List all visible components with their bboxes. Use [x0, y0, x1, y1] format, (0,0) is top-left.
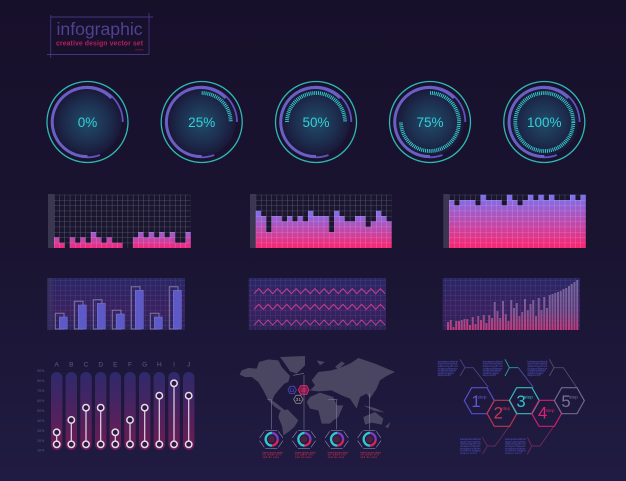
marker captions: sed do eius: [295, 456, 312, 459]
percent axis: 50%: [37, 409, 45, 413]
step captions: adipiscing elit sed: [527, 364, 548, 368]
column letters: H: [157, 362, 162, 368]
gauge 25%: [161, 82, 242, 162]
column letters: G: [142, 362, 147, 368]
marker captions: sed do eius: [262, 456, 280, 459]
step 2 hex: step: [501, 406, 511, 411]
step captions: do eiusmod tempor: [460, 444, 482, 448]
location marker 4: [358, 430, 381, 448]
step 2 hex: 2: [494, 403, 503, 422]
marker captions: sed do eius: [328, 456, 345, 459]
step captions: incididunt ut labore: [460, 446, 481, 450]
step captions: lorem ipsum dolor sit: [527, 359, 547, 363]
gauge 0%: 0%: [78, 115, 97, 130]
marker captions: lorem ipsum dolor: [328, 451, 348, 454]
step captions: adipiscing elit sed: [460, 442, 481, 446]
connector: step 4: [527, 426, 554, 454]
step 2 hex: [487, 400, 517, 426]
marker captions: sed do eius: [360, 456, 378, 459]
slider chart: [37, 362, 194, 452]
marker captions: lorem ipsum dolor: [360, 451, 381, 454]
marker captions: lorem ipsum dolor: [295, 451, 316, 454]
gauge 75%: [390, 82, 470, 162]
step captions: do eiusmod tempor: [527, 366, 548, 370]
column letters: I: [173, 362, 175, 368]
column letters: F: [128, 362, 132, 368]
connector: step 3: [505, 359, 533, 387]
column letters: B: [69, 362, 73, 368]
block chart: medium values: [250, 194, 392, 248]
percent axis: 60%: [37, 399, 45, 403]
gauge 100%: 100%: [527, 115, 562, 130]
percent axis: 10%: [37, 448, 45, 452]
step captions: do eiusmod tempor: [438, 366, 459, 370]
block chart: high values: [443, 194, 586, 248]
gauge 0%: [47, 82, 128, 162]
step 5 hex: step: [569, 395, 578, 400]
step captions: do eiusmod tempor: [483, 366, 504, 370]
step 5 hex: 5: [561, 392, 571, 411]
step 3 hex: 3: [516, 392, 526, 411]
percent axis: 20%: [37, 439, 45, 443]
percent axis: 30%: [37, 429, 45, 433]
title block: infographic: [56, 19, 143, 39]
slider knobs: [54, 380, 192, 447]
step 3 hex: [509, 388, 539, 414]
step 3 hex: step: [524, 395, 533, 400]
gauge 75%: 75%: [416, 115, 444, 130]
percent axis: 70%: [37, 389, 45, 393]
gauge 100%: [504, 82, 585, 162]
location marker 3: [325, 430, 348, 448]
connector: step 2: [482, 426, 509, 454]
column letters: A: [55, 362, 60, 368]
map leader lines: [267, 373, 369, 429]
tracks: [51, 372, 194, 450]
step captions: et dolore magna: [527, 371, 544, 375]
step captions: et dolore magna: [483, 371, 499, 375]
step diagram: [438, 359, 584, 455]
step captions: adipiscing elit sed: [438, 364, 458, 368]
location marker 2: [292, 430, 316, 448]
title block: vectors: [135, 48, 144, 52]
step 1 hex: [464, 388, 494, 414]
marker captions: sit amet elit: [295, 454, 313, 457]
percent axis: 40%: [37, 419, 45, 423]
percent axis: 80%: [37, 379, 45, 383]
step captions: aliqua enim: [527, 373, 541, 377]
step captions: amet consectetur: [527, 362, 548, 366]
step 1 hex: 1: [471, 392, 481, 411]
marker captions: [262, 451, 381, 459]
gauge 50%: [276, 82, 356, 162]
step captions: lorem ipsum dolor sit: [483, 359, 503, 363]
map hex badges: 20: [301, 388, 307, 394]
map hex badges: 31: [296, 397, 301, 403]
step captions: incididunt ut labore: [438, 369, 456, 373]
step captions: aliqua enim: [438, 373, 451, 377]
column letters: C: [84, 362, 89, 368]
step captions: aliqua enim: [483, 373, 496, 377]
step captions: do eiusmod tempor: [505, 444, 527, 448]
step captions: amet consectetur: [438, 362, 459, 366]
step captions: lorem ipsum dolor sit: [460, 437, 481, 441]
paired bar chart: [47, 278, 185, 330]
connector: step 1: [460, 359, 488, 387]
percent axis: [37, 369, 45, 452]
step captions: lorem ipsum dolor sit: [505, 437, 526, 441]
step 4 hex: 4: [538, 403, 547, 422]
step 5 hex: [554, 388, 584, 414]
step captions: adipiscing elit sed: [483, 364, 503, 368]
map hex badges: [288, 386, 309, 403]
step 1 hex: step: [478, 395, 487, 400]
step captions: [438, 359, 548, 455]
gauge 50%: 50%: [302, 115, 330, 130]
step captions: incididunt ut labore: [483, 369, 501, 373]
slider stems: [57, 383, 189, 444]
step captions: et dolore magna: [438, 371, 454, 375]
step captions: et dolore magna: [460, 449, 481, 453]
column letters: J: [187, 362, 190, 368]
step 4 hex: step: [546, 408, 555, 413]
title block: creative design vector set: [56, 40, 144, 48]
step 4 hex: [532, 400, 562, 426]
location marker 1: [260, 430, 283, 448]
column letters: D: [98, 362, 103, 368]
step captions: amet consectetur: [483, 362, 504, 366]
marker captions: sit amet elit: [360, 454, 379, 457]
step captions: adipiscing elit sed: [505, 442, 526, 446]
column letters: [55, 362, 190, 368]
block chart: low values: [48, 194, 191, 248]
step captions: incididunt ut labore: [505, 446, 526, 450]
spike bar chart: [443, 278, 580, 330]
zigzag line chart: [249, 278, 386, 330]
world map: [240, 356, 395, 459]
step captions: aliqua enim: [505, 451, 522, 455]
marker captions: sit amet elit: [328, 454, 346, 457]
step captions: et dolore magna: [505, 449, 526, 453]
step captions: lorem ipsum dolor sit: [438, 359, 458, 363]
step captions: aliqua enim: [460, 451, 477, 455]
step captions: incididunt ut labore: [527, 369, 546, 373]
title block: [47, 13, 153, 58]
marker captions: sit amet elit: [262, 454, 281, 457]
column letters: E: [113, 362, 118, 368]
step captions: amet consectetur: [460, 439, 482, 443]
continents: [240, 356, 395, 435]
gauge 25%: 25%: [188, 115, 215, 130]
connector: step 5: [549, 359, 577, 387]
step captions: amet consectetur: [505, 439, 527, 443]
percent axis: 90%: [37, 369, 45, 373]
marker captions: lorem ipsum dolor: [262, 451, 283, 454]
map hex badges: 11: [289, 388, 295, 394]
